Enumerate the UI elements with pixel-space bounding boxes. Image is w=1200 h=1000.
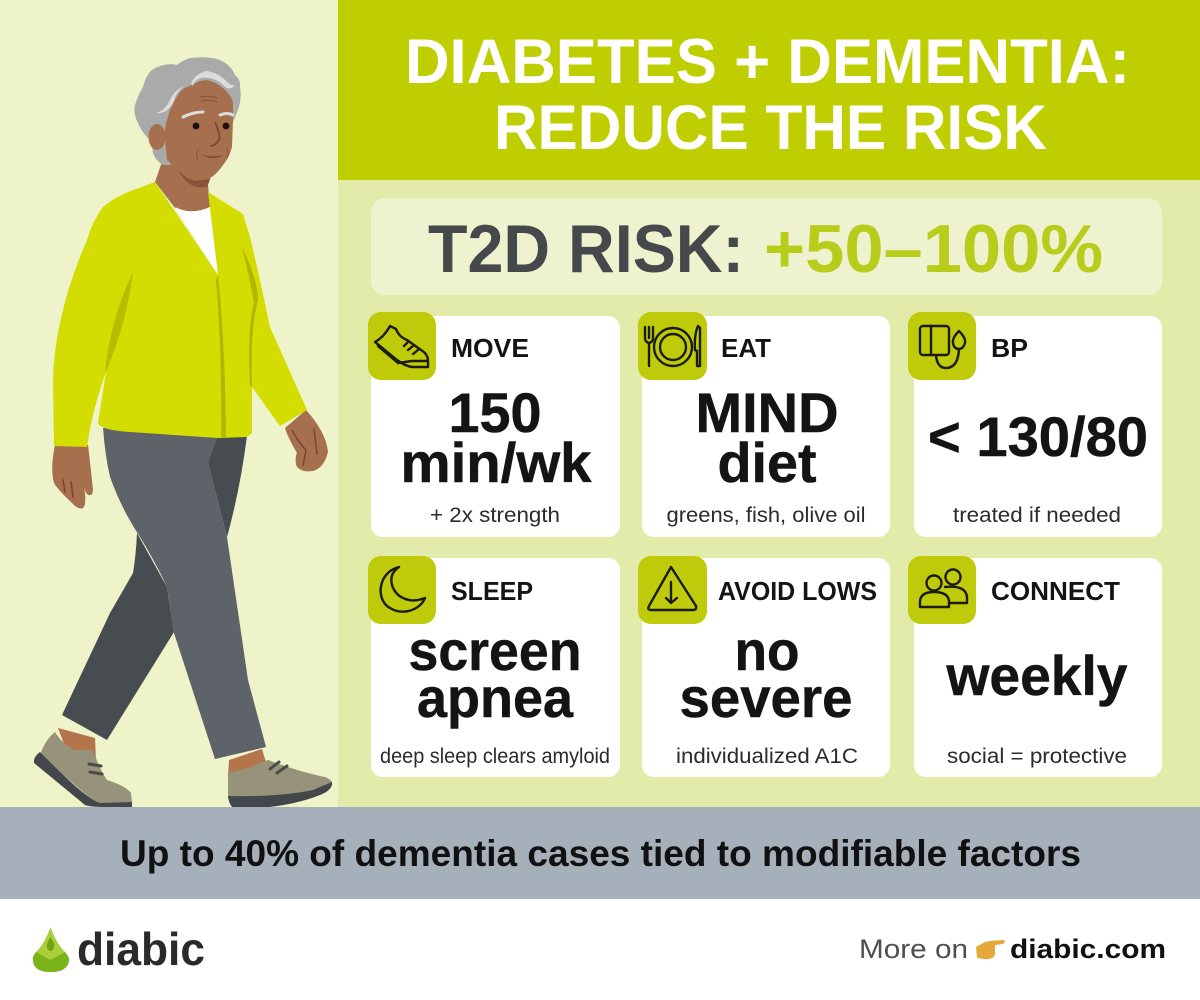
bottom banner: Up to 40% of dementia cases tied to modifiable factors — [120, 833, 1081, 874]
card: move: 150 — [448, 381, 542, 444]
card: connect: CONNECT — [991, 576, 1120, 606]
title: REDUCE THE RISK — [494, 93, 1047, 163]
risk banner: T2D RISK: — [428, 211, 744, 287]
card: avoid lows: individualized A1C — [676, 745, 858, 768]
card: sleep: apnea — [417, 666, 574, 729]
icon: green drop — [33, 927, 69, 972]
card: connect — [908, 556, 1162, 777]
footer link — [859, 934, 1166, 964]
card: sleep: SLEEP — [451, 576, 533, 606]
card: move: MOVE — [451, 333, 529, 363]
card: eat: EAT — [721, 333, 771, 363]
card: blood pressure: treated if needed — [953, 504, 1121, 527]
cardigan — [53, 182, 307, 447]
eyes — [193, 123, 199, 129]
icon: plate and cutlery — [638, 312, 707, 380]
card: eat: greens, fish, olive oil — [666, 504, 866, 527]
card: blood pressure: < 130/80 — [928, 405, 1148, 468]
right hand — [285, 410, 328, 471]
back leg — [62, 533, 174, 740]
icon: shoe — [368, 312, 436, 380]
card: avoid lows — [638, 556, 890, 777]
risk banner: +50–100% — [764, 211, 1103, 287]
card: avoid lows: AVOID LOWS — [718, 576, 877, 606]
risk banner — [371, 198, 1162, 295]
card: eat: diet — [718, 431, 816, 494]
head — [134, 57, 241, 187]
icon: blood pressure cuff — [908, 312, 976, 380]
card: connect: weekly — [946, 644, 1128, 707]
card: blood pressure — [908, 312, 1162, 537]
card: eat: MIND — [696, 381, 838, 444]
footer link: More on — [859, 934, 968, 964]
neck — [155, 150, 215, 212]
card: avoid lows: no — [734, 619, 800, 682]
hair streaks — [156, 71, 235, 113]
cardigan shadows — [105, 247, 258, 437]
left hand — [52, 445, 93, 508]
illustration: older woman walking — [34, 57, 332, 809]
card: blood pressure: BP — [991, 333, 1028, 363]
footer logo: diabic: diabic — [77, 923, 205, 975]
back shoe — [34, 728, 132, 807]
footer link: diabic.com — [1010, 934, 1166, 964]
panel: right content background — [338, 180, 1200, 807]
front leg — [103, 428, 266, 759]
icon: two people — [908, 556, 976, 624]
front shoe — [228, 749, 332, 809]
chin shadow — [178, 170, 210, 187]
card: move: + 2x strength — [430, 504, 560, 527]
card: avoid lows: severe — [680, 666, 852, 729]
icon: pointing hand — [976, 940, 1005, 959]
rear trouser shadow — [208, 436, 247, 537]
card: sleep: deep sleep clears amyloid — [380, 745, 610, 768]
icon: crescent moon — [368, 556, 436, 624]
title: DIABETES + DEMENTIA: — [405, 27, 1130, 97]
card: move: min/wk — [400, 431, 592, 494]
panel: left figure background — [0, 0, 338, 807]
nose, mouth, wrinkles — [210, 122, 220, 146]
icon: warning triangle with down arrow — [638, 556, 707, 624]
bottom banner — [0, 807, 1200, 899]
card: eat — [638, 312, 890, 537]
title — [405, 27, 1130, 163]
header band with title — [338, 0, 1200, 180]
card: sleep — [368, 556, 620, 777]
card: move — [368, 312, 620, 537]
eyebrows — [183, 112, 233, 117]
card: sleep: screen — [408, 619, 582, 682]
card: connect: social = protective — [947, 745, 1127, 768]
white shirt — [175, 206, 218, 275]
